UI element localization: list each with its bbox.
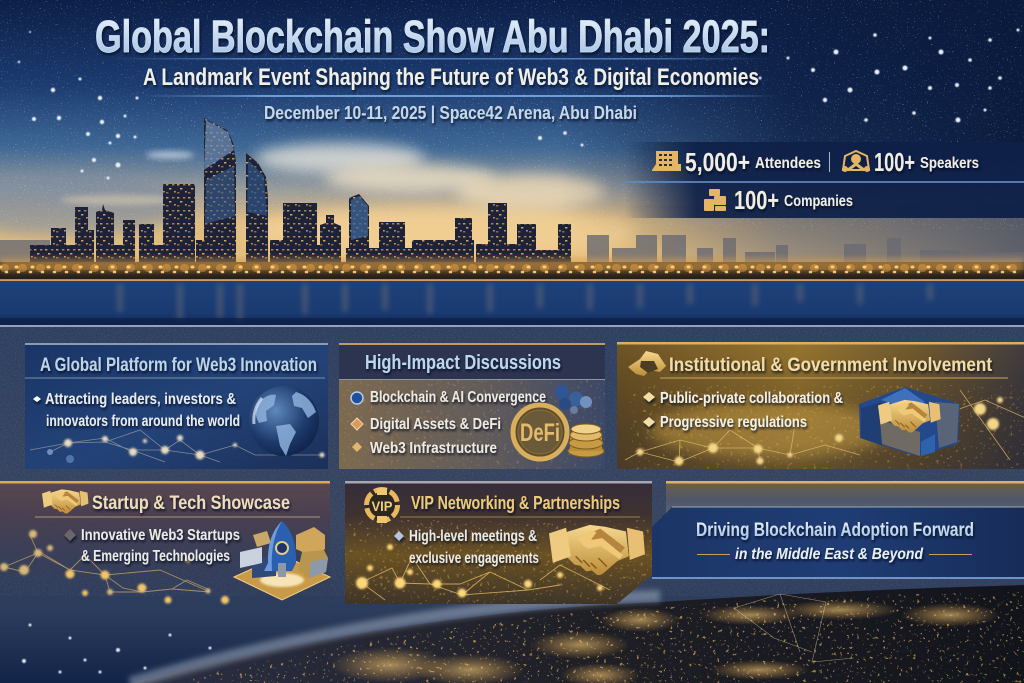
date and venue: December 10-11, 2025 | Space42 Arena, Abu Dhabi bbox=[264, 103, 637, 123]
panel: closing banner bbox=[652, 481, 1024, 579]
bullet text: Attracting leaders, investors & bbox=[45, 391, 236, 408]
background: night sky and sunset bbox=[0, 0, 1024, 283]
bullets: High-level meetings & bbox=[409, 528, 537, 545]
shoreline lights bbox=[0, 258, 1024, 280]
panel: startup and tech showcase bbox=[0, 481, 330, 604]
heading: VIP Networking & Partnerships bbox=[411, 492, 620, 513]
network bbox=[0, 530, 229, 604]
attendees stat: 5,000+ bbox=[685, 147, 750, 177]
icon: DeFi coins bbox=[513, 405, 604, 459]
city skyline bbox=[0, 118, 1024, 280]
panel: VIP networking bbox=[345, 481, 652, 604]
earth at night bbox=[22, 585, 1024, 683]
subheading: in the Middle East & Beyond bbox=[735, 546, 924, 563]
icon: bank emblem bbox=[628, 351, 666, 376]
bullet icons bbox=[351, 392, 363, 452]
bullets bbox=[394, 528, 539, 567]
network bbox=[625, 390, 1024, 466]
heading: A Global Platform for Web3 Innovation bbox=[40, 355, 317, 376]
bullet text bbox=[33, 391, 240, 430]
title: Global Blockchain Show Abu Dhabi 2025: bbox=[95, 11, 770, 62]
icon: handshake on server cube bbox=[859, 387, 960, 456]
speakers stat: 100+ bbox=[874, 147, 915, 177]
bullet text: Blockchain & AI Convergence bbox=[370, 389, 546, 406]
icon: blockchain crystals bbox=[555, 385, 592, 414]
icon: DeFi coins: DeFi bbox=[520, 419, 560, 447]
panel: high-impact discussions bbox=[339, 343, 605, 469]
companies stat bbox=[734, 185, 853, 215]
star field bbox=[18, 28, 1020, 180]
icon: handshake bbox=[549, 525, 645, 575]
speakers stat: Speakers bbox=[920, 155, 979, 172]
icon: globe bbox=[249, 386, 319, 456]
title divider lines bbox=[110, 58, 780, 97]
lower section backdrop bbox=[0, 325, 1024, 683]
attendees stat bbox=[685, 147, 821, 177]
stats band bbox=[625, 142, 1024, 218]
icon: speakers bbox=[843, 151, 869, 171]
companies stat: 100+ bbox=[734, 185, 779, 215]
bullet text: Digital Assets & DeFi bbox=[370, 416, 501, 433]
icon: rocket launch pad bbox=[234, 521, 330, 600]
bullets: Progressive regulations bbox=[660, 414, 807, 431]
bullet text: Web3 Infrastructure bbox=[370, 440, 497, 457]
heading: Startup & Tech Showcase bbox=[92, 493, 290, 514]
bullets bbox=[643, 390, 843, 431]
network bbox=[30, 430, 324, 463]
companies stat: Companies bbox=[784, 193, 853, 210]
water and reflections bbox=[0, 281, 1024, 326]
panel: institutional and government bbox=[617, 342, 1024, 469]
icon: handshake bbox=[42, 489, 88, 514]
subtitle: A Landmark Event Shaping the Future of Web3 & Digital Economies bbox=[143, 64, 759, 91]
bullets bbox=[64, 527, 240, 565]
panel: global platform bbox=[25, 343, 328, 469]
bullet text: innovators from around the world bbox=[46, 413, 240, 430]
heading: High-Impact Discussions bbox=[365, 352, 561, 374]
bullets: exclusive engagements bbox=[409, 550, 539, 567]
speakers stat bbox=[874, 147, 979, 177]
bullets: Public-private collaboration & bbox=[660, 390, 843, 407]
network bbox=[356, 544, 610, 600]
bullet text bbox=[370, 389, 546, 457]
icon: VIP badge bbox=[366, 488, 398, 523]
bullets: Innovative Web3 Startups bbox=[81, 527, 240, 544]
bullets: & Emerging Technologies bbox=[81, 548, 230, 565]
heading: Institutional & Government Involvement bbox=[669, 355, 993, 376]
icon: VIP badge: VIP bbox=[372, 498, 392, 514]
icon: companies bbox=[704, 189, 726, 211]
icon: building bbox=[652, 151, 681, 171]
attendees stat: Attendees bbox=[755, 155, 821, 172]
